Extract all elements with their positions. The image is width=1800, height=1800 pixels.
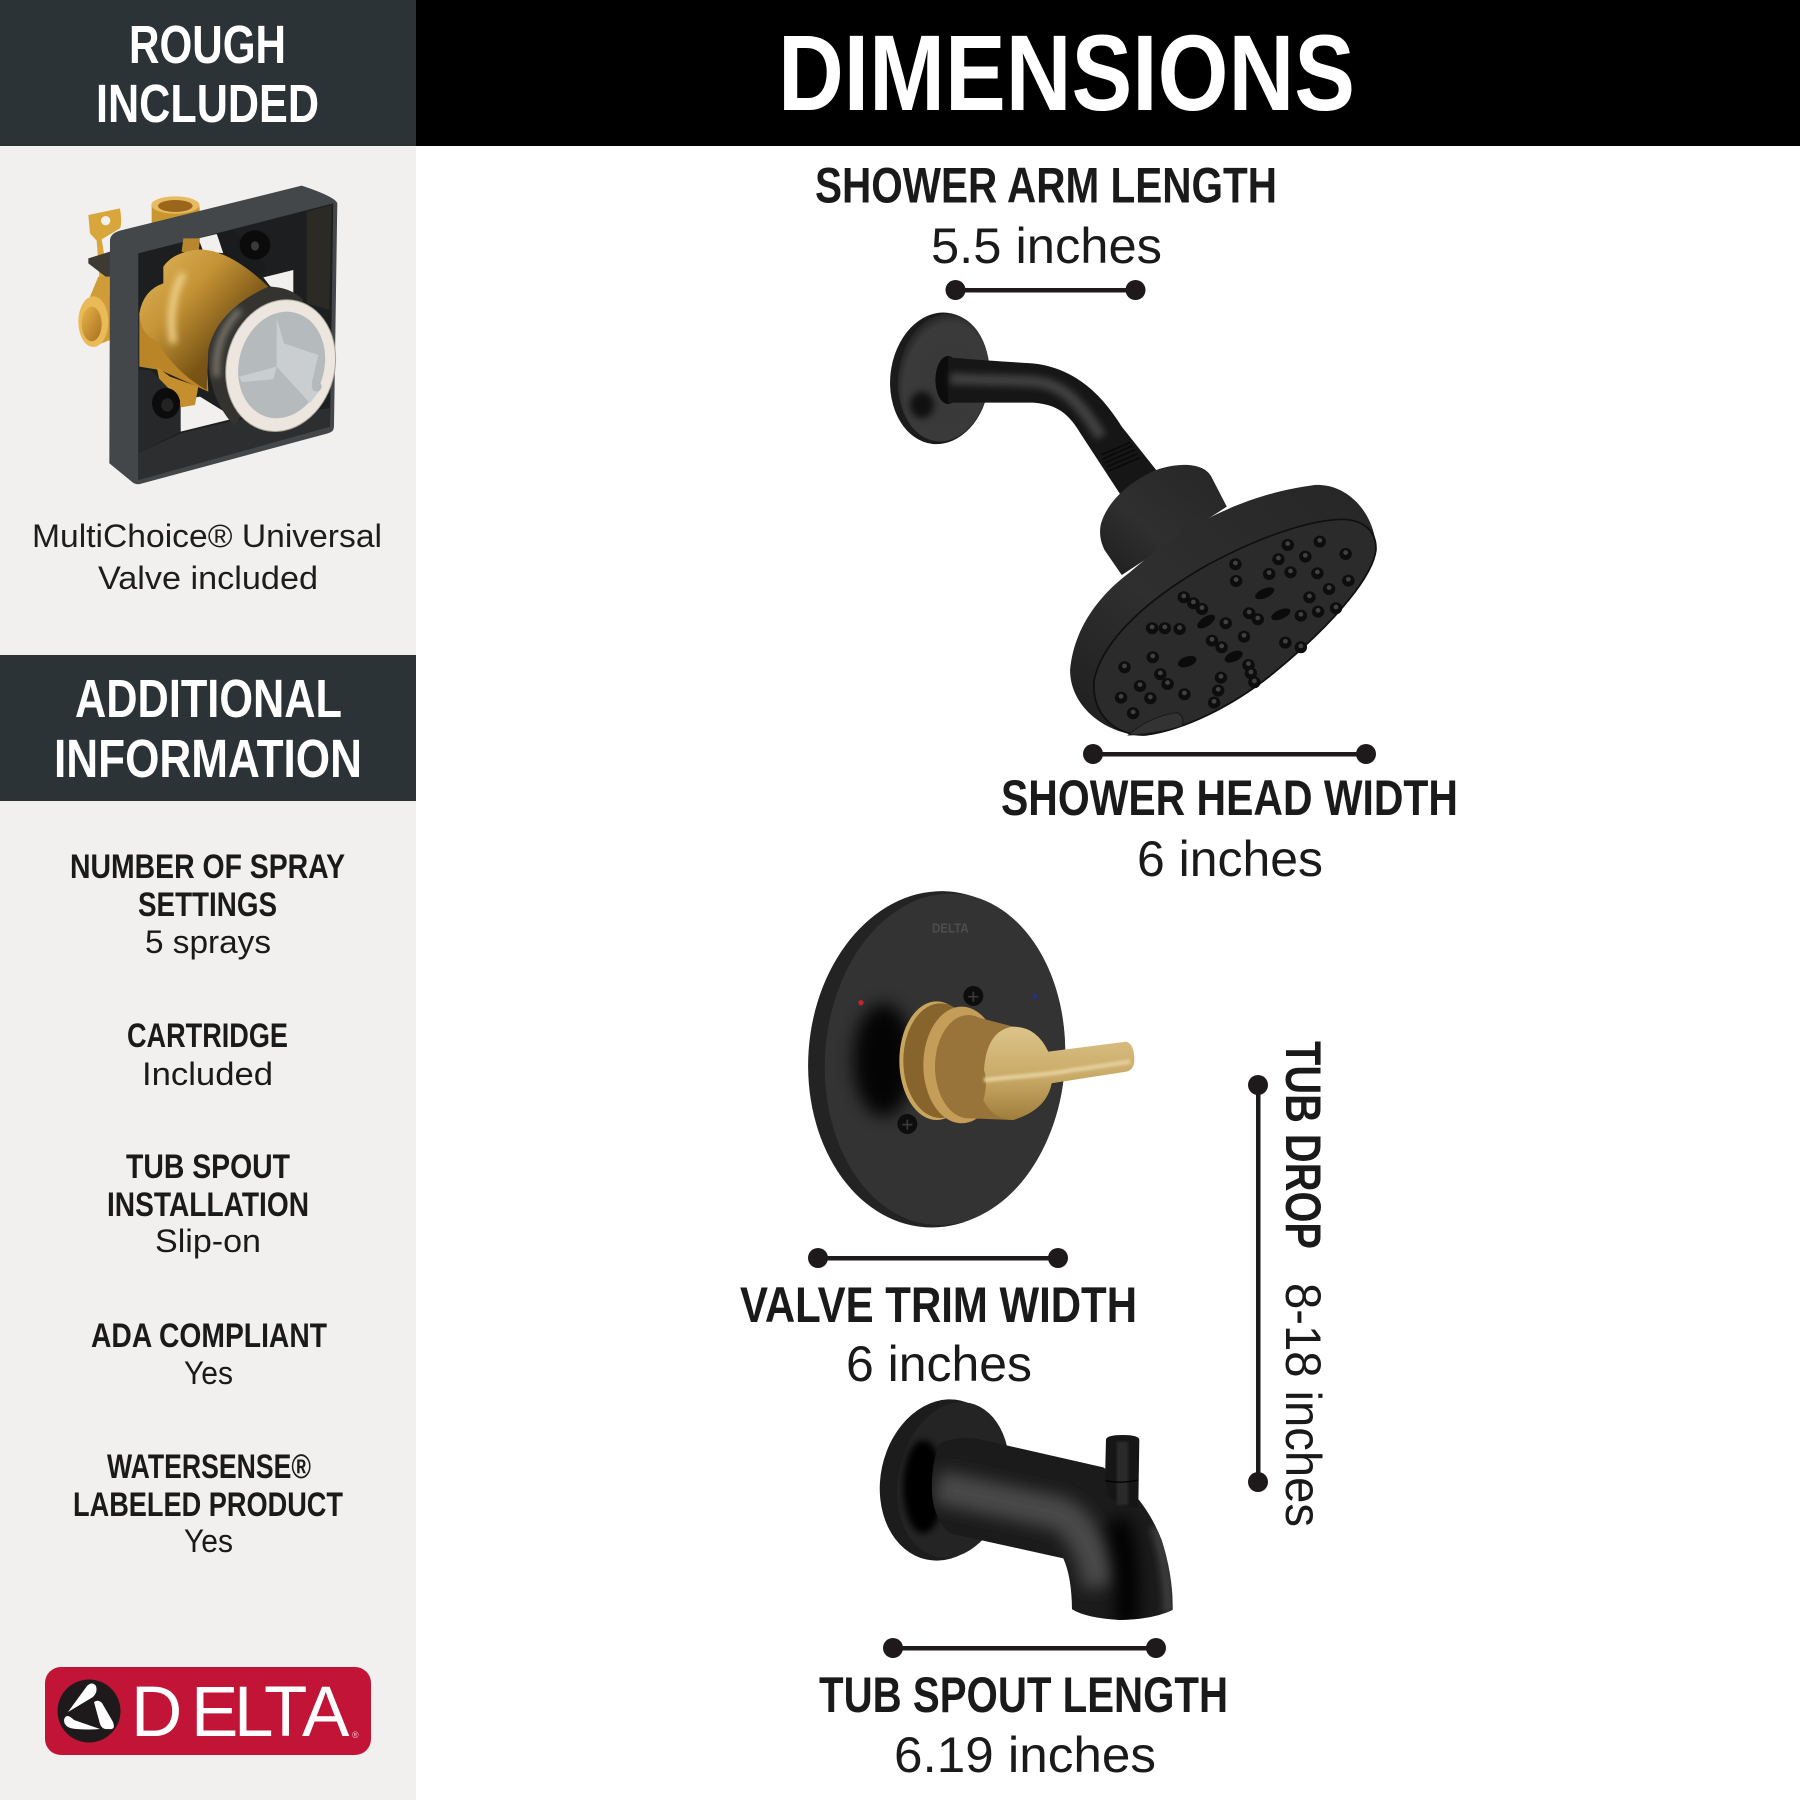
- heading: additional information: ADDITIONAL: [75, 669, 342, 729]
- label: shower head width: [1001, 770, 1458, 887]
- label: tub drop: 8-18 inches: [1275, 1283, 1331, 1527]
- label: valve trim width: 6 inches: [846, 1336, 1032, 1392]
- label: shower arm length: [815, 158, 1277, 274]
- collar: [1100, 465, 1227, 575]
- logo: delta: DELTA: [131, 1673, 350, 1752]
- spec: cartridge: [127, 1017, 288, 1092]
- arrow: valve trim dimension line: [808, 1248, 1068, 1268]
- spec: watersense: LABELED PRODUCT: [73, 1486, 343, 1524]
- spec: spray settings: 5 sprays: [145, 924, 271, 960]
- image: shower head and arm: [883, 308, 1376, 735]
- mounting bracket: [88, 208, 121, 287]
- lower inner wall: [138, 408, 330, 480]
- image: tub spout: [880, 1399, 1173, 1620]
- head body: [1070, 485, 1376, 735]
- label: shower arm length: 5.5 inches: [931, 218, 1162, 274]
- heading: rough included: INCLUDED: [96, 74, 319, 134]
- brass top nipple: [151, 196, 200, 225]
- spout body: [932, 1438, 1173, 1620]
- lower left bracket: [138, 370, 181, 453]
- trim plate: [797, 882, 1076, 1236]
- upper screw: [217, 230, 270, 277]
- spec: watersense: [73, 1448, 343, 1559]
- arrow: tub drop dimension line: [1248, 1075, 1268, 1492]
- spout flange: [865, 1387, 1023, 1573]
- brass body: [139, 249, 268, 390]
- heading: rough included: [0, 0, 416, 146]
- spec: ada compliant: [91, 1317, 327, 1391]
- wall flange: [883, 308, 996, 449]
- heading: rough included: ROUGH: [129, 15, 286, 75]
- heading: additional information: INFORMATION: [54, 729, 362, 789]
- image: valve trim and handle: [797, 882, 1134, 1236]
- spec: cartridge: CARTRIDGE: [127, 1017, 288, 1055]
- label: valve trim width: VALVE TRIM WIDTH: [740, 1277, 1137, 1333]
- label: tub drop: [1275, 1041, 1331, 1527]
- arrow: tub spout dimension line: [883, 1638, 1166, 1658]
- see-through window openings: [181, 234, 293, 432]
- spec: tub spout installation: [107, 1148, 309, 1259]
- lower screw: [152, 388, 180, 419]
- logo: delta: ®: [352, 1730, 359, 1740]
- brass neck: [182, 238, 200, 255]
- arrow: shower head dimension line: [1083, 744, 1376, 764]
- label: shower head width: SHOWER HEAD WIDTH: [1001, 770, 1458, 826]
- label: shower arm length: SHOWER ARM LENGTH: [815, 158, 1277, 214]
- spec: tub spout installation: Slip-on: [155, 1223, 261, 1259]
- spec: spray settings: SETTINGS: [138, 886, 277, 924]
- heading: dimensions banner: DIMENSIONS: [778, 12, 1355, 133]
- spec: spray settings: NUMBER OF SPRAY: [70, 848, 345, 886]
- label: tub spout length: [819, 1667, 1228, 1783]
- label: tub spout length: TUB SPOUT LENGTH: [819, 1667, 1228, 1723]
- brass elbow lower left: [139, 313, 208, 392]
- nickel sleeve: [208, 287, 303, 427]
- panel: left sidebar background: [0, 0, 416, 1800]
- spec: spray settings: [70, 848, 345, 960]
- spec: watersense: Yes: [184, 1523, 233, 1559]
- trim plate: DELTA: [932, 921, 969, 936]
- screw bottom: [897, 1114, 917, 1134]
- spec: tub spout installation: TUB SPOUT: [126, 1148, 290, 1186]
- text: valve caption: Valve included: [98, 560, 318, 596]
- plastic frame: [109, 186, 337, 484]
- logo: delta: [45, 1667, 371, 1755]
- lower brass thread: [157, 367, 198, 407]
- label: tub drop: TUB DROP: [1275, 1041, 1331, 1249]
- gray plaster guard: [226, 302, 337, 428]
- label: valve trim width: [740, 1277, 1137, 1392]
- chrome ring: [211, 287, 350, 444]
- label: shower head width: 6 inches: [1137, 831, 1323, 887]
- spec: tub spout installation: INSTALLATION: [107, 1186, 309, 1224]
- threads: [1101, 442, 1140, 471]
- spec: ada compliant: Yes: [184, 1355, 233, 1391]
- handle lever: [983, 1027, 1134, 1120]
- handle escutcheon: [899, 1001, 1013, 1123]
- frame interior: [138, 203, 333, 480]
- text: valve caption: [32, 518, 382, 596]
- image: rough-in valve: [78, 186, 350, 484]
- shower arm: [948, 357, 1156, 497]
- spec: cartridge: Included: [142, 1056, 273, 1092]
- spec: watersense: WATERSENSE®: [107, 1448, 311, 1486]
- label: tub spout length: 6.19 inches: [894, 1727, 1156, 1783]
- heading: dimensions banner: [416, 0, 1800, 146]
- brass highlight: [171, 273, 183, 343]
- screw top: [963, 986, 983, 1006]
- heading: additional information: [0, 655, 416, 801]
- text: valve caption: MultiChoice® Universal: [32, 518, 382, 554]
- interior right wall sheen: [307, 205, 332, 310]
- left port: [78, 277, 110, 347]
- arrow: shower arm dimension line: [946, 280, 1146, 300]
- diverter knob: [1105, 1435, 1139, 1507]
- spec: ada compliant: ADA COMPLIANT: [91, 1317, 327, 1355]
- head face with nozzles: [1094, 519, 1376, 735]
